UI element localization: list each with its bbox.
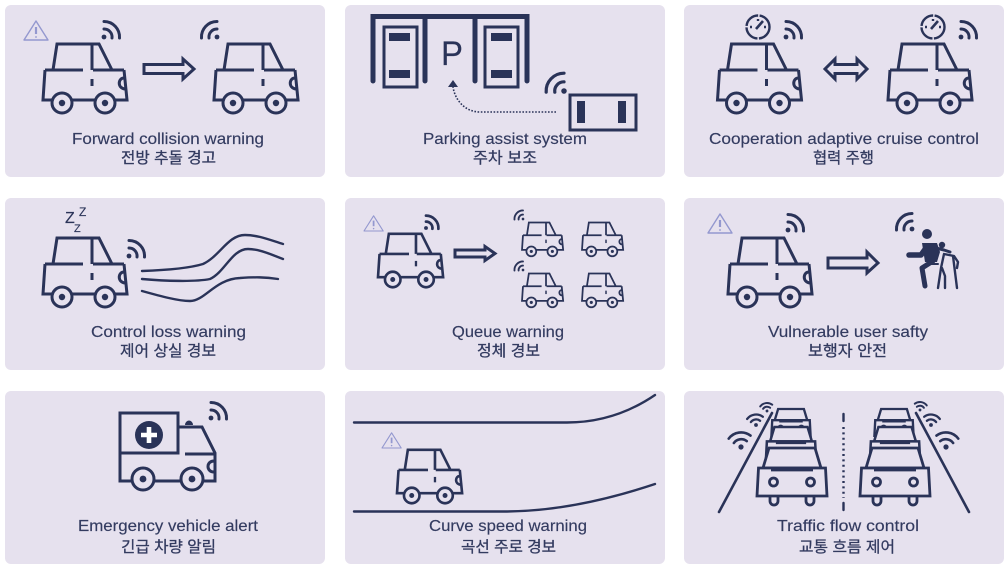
arrow — [828, 252, 878, 273]
icon: sleeping letters: Z — [74, 223, 81, 235]
icon: warning triangle — [24, 21, 48, 40]
icon: incoming signal — [896, 213, 914, 231]
car — [397, 450, 462, 503]
queued cars — [522, 222, 623, 307]
panel: control loss warning — [5, 198, 325, 370]
icon: outgoing signal — [786, 214, 804, 232]
label: English: Cooperation adaptive cruise control — [709, 131, 979, 148]
arrow — [455, 246, 495, 260]
icon: warning triangle — [382, 433, 401, 448]
panel: parking assist system — [345, 5, 665, 177]
car — [43, 238, 127, 307]
icon: sleeping letters: Z — [79, 205, 86, 219]
car — [728, 238, 812, 307]
label: Korean: 주차 보조 — [473, 149, 537, 167]
icon: car sending signal — [43, 44, 127, 113]
icon: warning triangle — [708, 214, 732, 233]
label: Korean: 제어 상실 경보 — [120, 342, 216, 360]
parking lot frame — [373, 16, 527, 81]
label: English: Parking assist system — [423, 131, 587, 148]
panel: cooperative adaptive cruise control — [684, 5, 1004, 177]
panel: queue warning — [345, 198, 665, 370]
label: Korean: 협력 주행 — [813, 149, 874, 167]
panel: curve speed warning — [345, 391, 665, 564]
main car — [378, 234, 443, 287]
label: Korean: 전방 추돌 경고 — [121, 149, 216, 167]
icon: receiving car — [214, 44, 298, 113]
parked car left — [384, 27, 417, 87]
skid lines — [142, 235, 283, 301]
icon: signal — [127, 240, 145, 258]
icon: signal — [424, 216, 438, 230]
road lines — [719, 413, 969, 512]
label: English: Emergency vehicle alert — [78, 518, 259, 535]
parked car right — [485, 27, 518, 87]
label: Korean: 정체 경보 — [477, 342, 540, 360]
panel: traffic flow control — [684, 391, 1004, 564]
icon: signal — [209, 402, 227, 420]
label: English: Queue warning — [452, 324, 564, 341]
icon: signal — [546, 73, 567, 94]
car right — [888, 44, 972, 113]
icon: right roadside signals — [914, 401, 959, 451]
icon: pedestrians — [909, 229, 958, 288]
parking letter: P — [441, 35, 463, 73]
icon: queue signals — [514, 210, 524, 271]
car left — [718, 44, 802, 113]
dotted path arrow — [448, 80, 556, 112]
icon: incoming signal — [201, 21, 219, 39]
icon: left roadside signals — [728, 402, 773, 451]
icon: sleeping letters: Z — [65, 210, 75, 227]
icon: signal right — [959, 21, 977, 39]
icon: right lane cars — [860, 409, 930, 505]
panel: forward collision warning — [5, 5, 325, 177]
arrow — [144, 59, 194, 79]
icon: warning triangle — [364, 216, 383, 231]
icon: ambulance — [120, 413, 215, 490]
label: Korean: 곡선 주로 경보 — [461, 538, 556, 556]
label: Korean: 보행자 안전 — [808, 342, 887, 360]
icon: gauge left — [746, 16, 770, 38]
moving car — [570, 95, 636, 130]
panel: vulnerable user safety — [684, 198, 1004, 370]
panel: emergency vehicle alert — [5, 391, 325, 564]
icon: gauge right — [922, 16, 944, 38]
label: English: Forward collision warning — [72, 131, 264, 148]
label: English: Control loss warning — [91, 324, 246, 341]
icon: left lane cars — [757, 409, 827, 505]
icon: sleeping letters — [65, 205, 86, 235]
icon: signal left — [784, 21, 802, 39]
road edges — [354, 395, 655, 512]
label: English: Curve speed warning — [429, 518, 587, 535]
icon: outgoing signal — [102, 21, 120, 39]
arrow: both directions — [825, 59, 867, 79]
label: Korean: 긴급 차량 알림 — [121, 538, 216, 556]
label: English: Traffic flow control — [777, 518, 919, 535]
label: Korean: 교통 흐름 제어 — [799, 538, 895, 556]
label: English: Vulnerable user safty — [768, 324, 928, 341]
